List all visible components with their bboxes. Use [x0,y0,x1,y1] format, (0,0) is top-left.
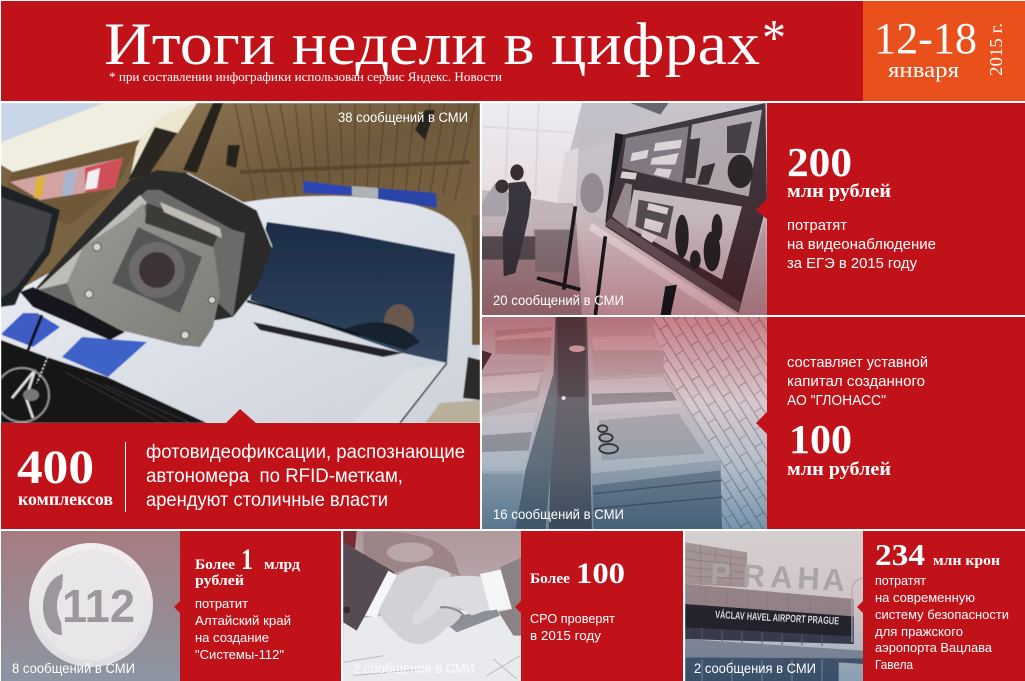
media count: 8 сообщений в СМИ [12,661,135,676]
hood inner panel [37,190,245,317]
description: на современную [875,590,975,605]
panel: exam video photo [482,103,772,316]
description [195,596,291,662]
headline: Более [530,571,570,587]
tint [685,531,863,681]
unit: млн рублей [787,182,891,202]
description: аэропорта Вацлава [875,640,993,655]
tower [685,542,747,587]
driver [384,304,414,334]
year: 2015 г. [986,23,1006,76]
flags [10,158,123,200]
description [530,611,615,643]
description: на видеонаблюдение [787,237,936,253]
terminal sign: VÁCLAV HAVEL AIRPORT PRAGUE [715,608,839,627]
header band [1,1,863,101]
description: "Системы-112" [195,647,284,662]
media count: 38 сообщений в СМИ [338,110,468,125]
headline: млрд [264,557,300,573]
colour tint [482,317,767,529]
panel: 1 billion [174,531,341,681]
description: автономера по RFID-меткам, [146,465,403,487]
media count: 2 сообщения в СМИ [694,661,816,676]
title: Итоги недели в цифрах [104,11,760,77]
left camera housing [1,185,60,307]
colour tint [482,103,767,315]
dark fascia [685,604,854,644]
date box [863,1,1025,101]
panel: 234 million crowns [857,531,1025,681]
headline: Более [195,557,235,573]
brick wall of bundles [652,317,769,530]
big number: 200 [787,139,852,185]
description: СРО проверят [530,611,615,626]
wall below monitor [576,210,724,314]
blue stripes [2,313,60,347]
grille [1,340,207,423]
panel: airport photo [682,529,869,681]
woman [503,164,531,276]
left hand [378,566,461,645]
stands [537,206,605,315]
description: за ЕГЭ в 2015 году [787,256,918,272]
bottom bar [20,287,125,340]
hood highlights [358,375,436,422]
unit: млн рублей [787,460,891,480]
aisle [549,317,592,530]
footnote: * при составлении инфографики использован сервис Яндекс. Новости [109,70,502,84]
roof band [685,584,854,616]
description: составляет уставной [787,355,928,371]
media count: 2 сообщения в СМИ [353,661,475,676]
description: потратят [787,218,847,234]
panel: 400 cameras callout [1,409,480,529]
big number: 100 [789,416,852,462]
description: Гавела [875,657,914,672]
description: в 2015 году [530,628,602,643]
panel: 112 image [1,531,180,681]
left cuff [365,571,397,617]
seated man [482,183,509,216]
panel: cameras photo [0,103,480,423]
media count: 20 сообщений в СМИ [493,293,624,308]
description: капитал созданного [787,374,925,390]
icon: 112 disc: 112 [62,580,135,632]
icon: 112 disc [29,543,153,667]
panel: handshake photo [340,529,527,681]
month: января [888,57,959,82]
media count: 16 сообщений в СМИ [493,507,624,522]
description: Алтайский край [195,613,291,628]
panel: banknotes photo [482,317,772,530]
description: систему безопасности [875,607,1009,622]
headline: рублей [195,573,244,589]
camera hood [33,170,272,330]
wall panels [557,148,579,210]
panel: 200 million [756,103,1025,315]
description: арендуют столичные власти [146,489,388,511]
screen images [622,126,689,183]
unit: комплексов [18,489,113,509]
headline [875,537,1000,572]
headline [195,543,300,589]
car body [1,196,480,423]
right sleeve [498,557,522,636]
right hand [412,576,490,625]
big number: 400 [17,441,94,494]
windshield [250,222,455,363]
headline: 100 [576,557,625,590]
description [787,218,936,272]
description: фотовидеофиксации, распознающие [146,441,465,463]
description [875,573,1009,672]
headline [530,557,625,590]
lens [112,227,202,313]
description: потратит [195,596,248,611]
monitor frame [605,103,767,313]
headline: 1 [241,543,253,576]
headline: 234 [875,537,925,572]
top stacks [589,327,652,337]
date range: 12-18 [874,14,977,63]
canopy [685,639,864,658]
PRAHA sign: PRAHA [710,556,846,598]
wiper and hood vent [247,301,360,335]
title: * [762,10,786,67]
main banknote stack [589,407,720,474]
light bar [303,181,352,195]
description [787,355,928,409]
camera body [67,203,220,347]
description: для пражского [875,624,963,639]
right cuff [480,569,513,611]
description [146,441,465,511]
description: потратят [875,573,926,588]
description: АО "ГЛОНАСС" [787,393,886,409]
left stacks [495,327,552,355]
left sleeve [343,542,395,631]
under shadow [450,610,500,632]
panel: more than 100 [515,531,683,681]
headline: млн крон [933,553,1000,569]
description: на создание [195,630,269,645]
panel: 100 million [756,317,1025,529]
